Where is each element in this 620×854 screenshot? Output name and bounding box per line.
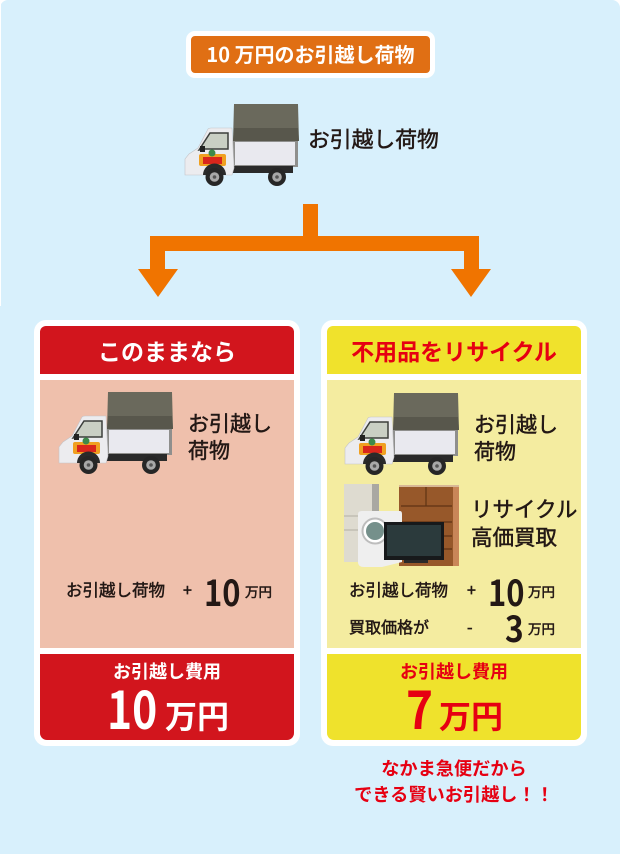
panel heading: このままなら [98,333,236,367]
cost number: 10 [488,565,525,617]
label: moving cargo: お引越し荷物 [308,123,439,154]
footer total number: 7 [406,669,433,744]
panel: recycle [321,320,587,746]
cargo label: お引越し [188,408,272,438]
panel body [40,380,294,648]
closing message [354,755,554,807]
cargo label [474,409,558,466]
panel footer [327,654,581,740]
buyback line [349,601,555,653]
panel: keep as is [34,320,300,746]
truck illustration [58,392,173,474]
closing message: できる賢いお引越し！！ [354,781,554,807]
cost label: お引越し荷物 [66,577,165,601]
panel header [40,326,294,374]
branching arrow [138,204,491,297]
cost label: お引越し荷物 [349,577,448,601]
cost line [349,565,555,617]
footer total number: 10 [107,669,157,744]
panel heading: 不用品をリサイクル [351,333,557,367]
footer label: お引越し費用 [113,658,221,684]
cost line [66,565,272,617]
buyback label: 買取価格が [349,614,429,638]
panel body [327,380,581,648]
appliances and furniture illustration [344,484,459,567]
buyback number: 3 [505,601,524,653]
plus sign: + [183,577,192,601]
truck illustration: top [184,104,299,186]
truck illustration [344,393,459,475]
recycle label [471,493,577,552]
title badge [186,31,435,78]
cost unit: 万円 [528,581,555,601]
recycle label: リサイクル [471,493,577,524]
cargo label [188,408,272,465]
recycle label: 高価買取 [471,521,557,552]
closing message: なかま急便だから [381,755,527,781]
cargo label: 荷物 [474,436,516,466]
cost number: 10 [204,565,241,617]
minus sign: - [467,614,473,638]
panel footer [40,654,294,740]
title text: 10 万円のお引越し荷物 [206,39,415,68]
footer label: お引越し費用 [400,658,508,684]
cost unit: 万円 [245,581,272,601]
cargo label: お引越し [474,409,558,439]
cargo label: 荷物 [188,435,230,465]
footer total unit: 万円 [165,692,229,738]
panel header [327,326,581,374]
footer total unit: 万円 [439,692,503,738]
plus sign: + [467,577,476,601]
buyback unit: 万円 [528,618,555,638]
